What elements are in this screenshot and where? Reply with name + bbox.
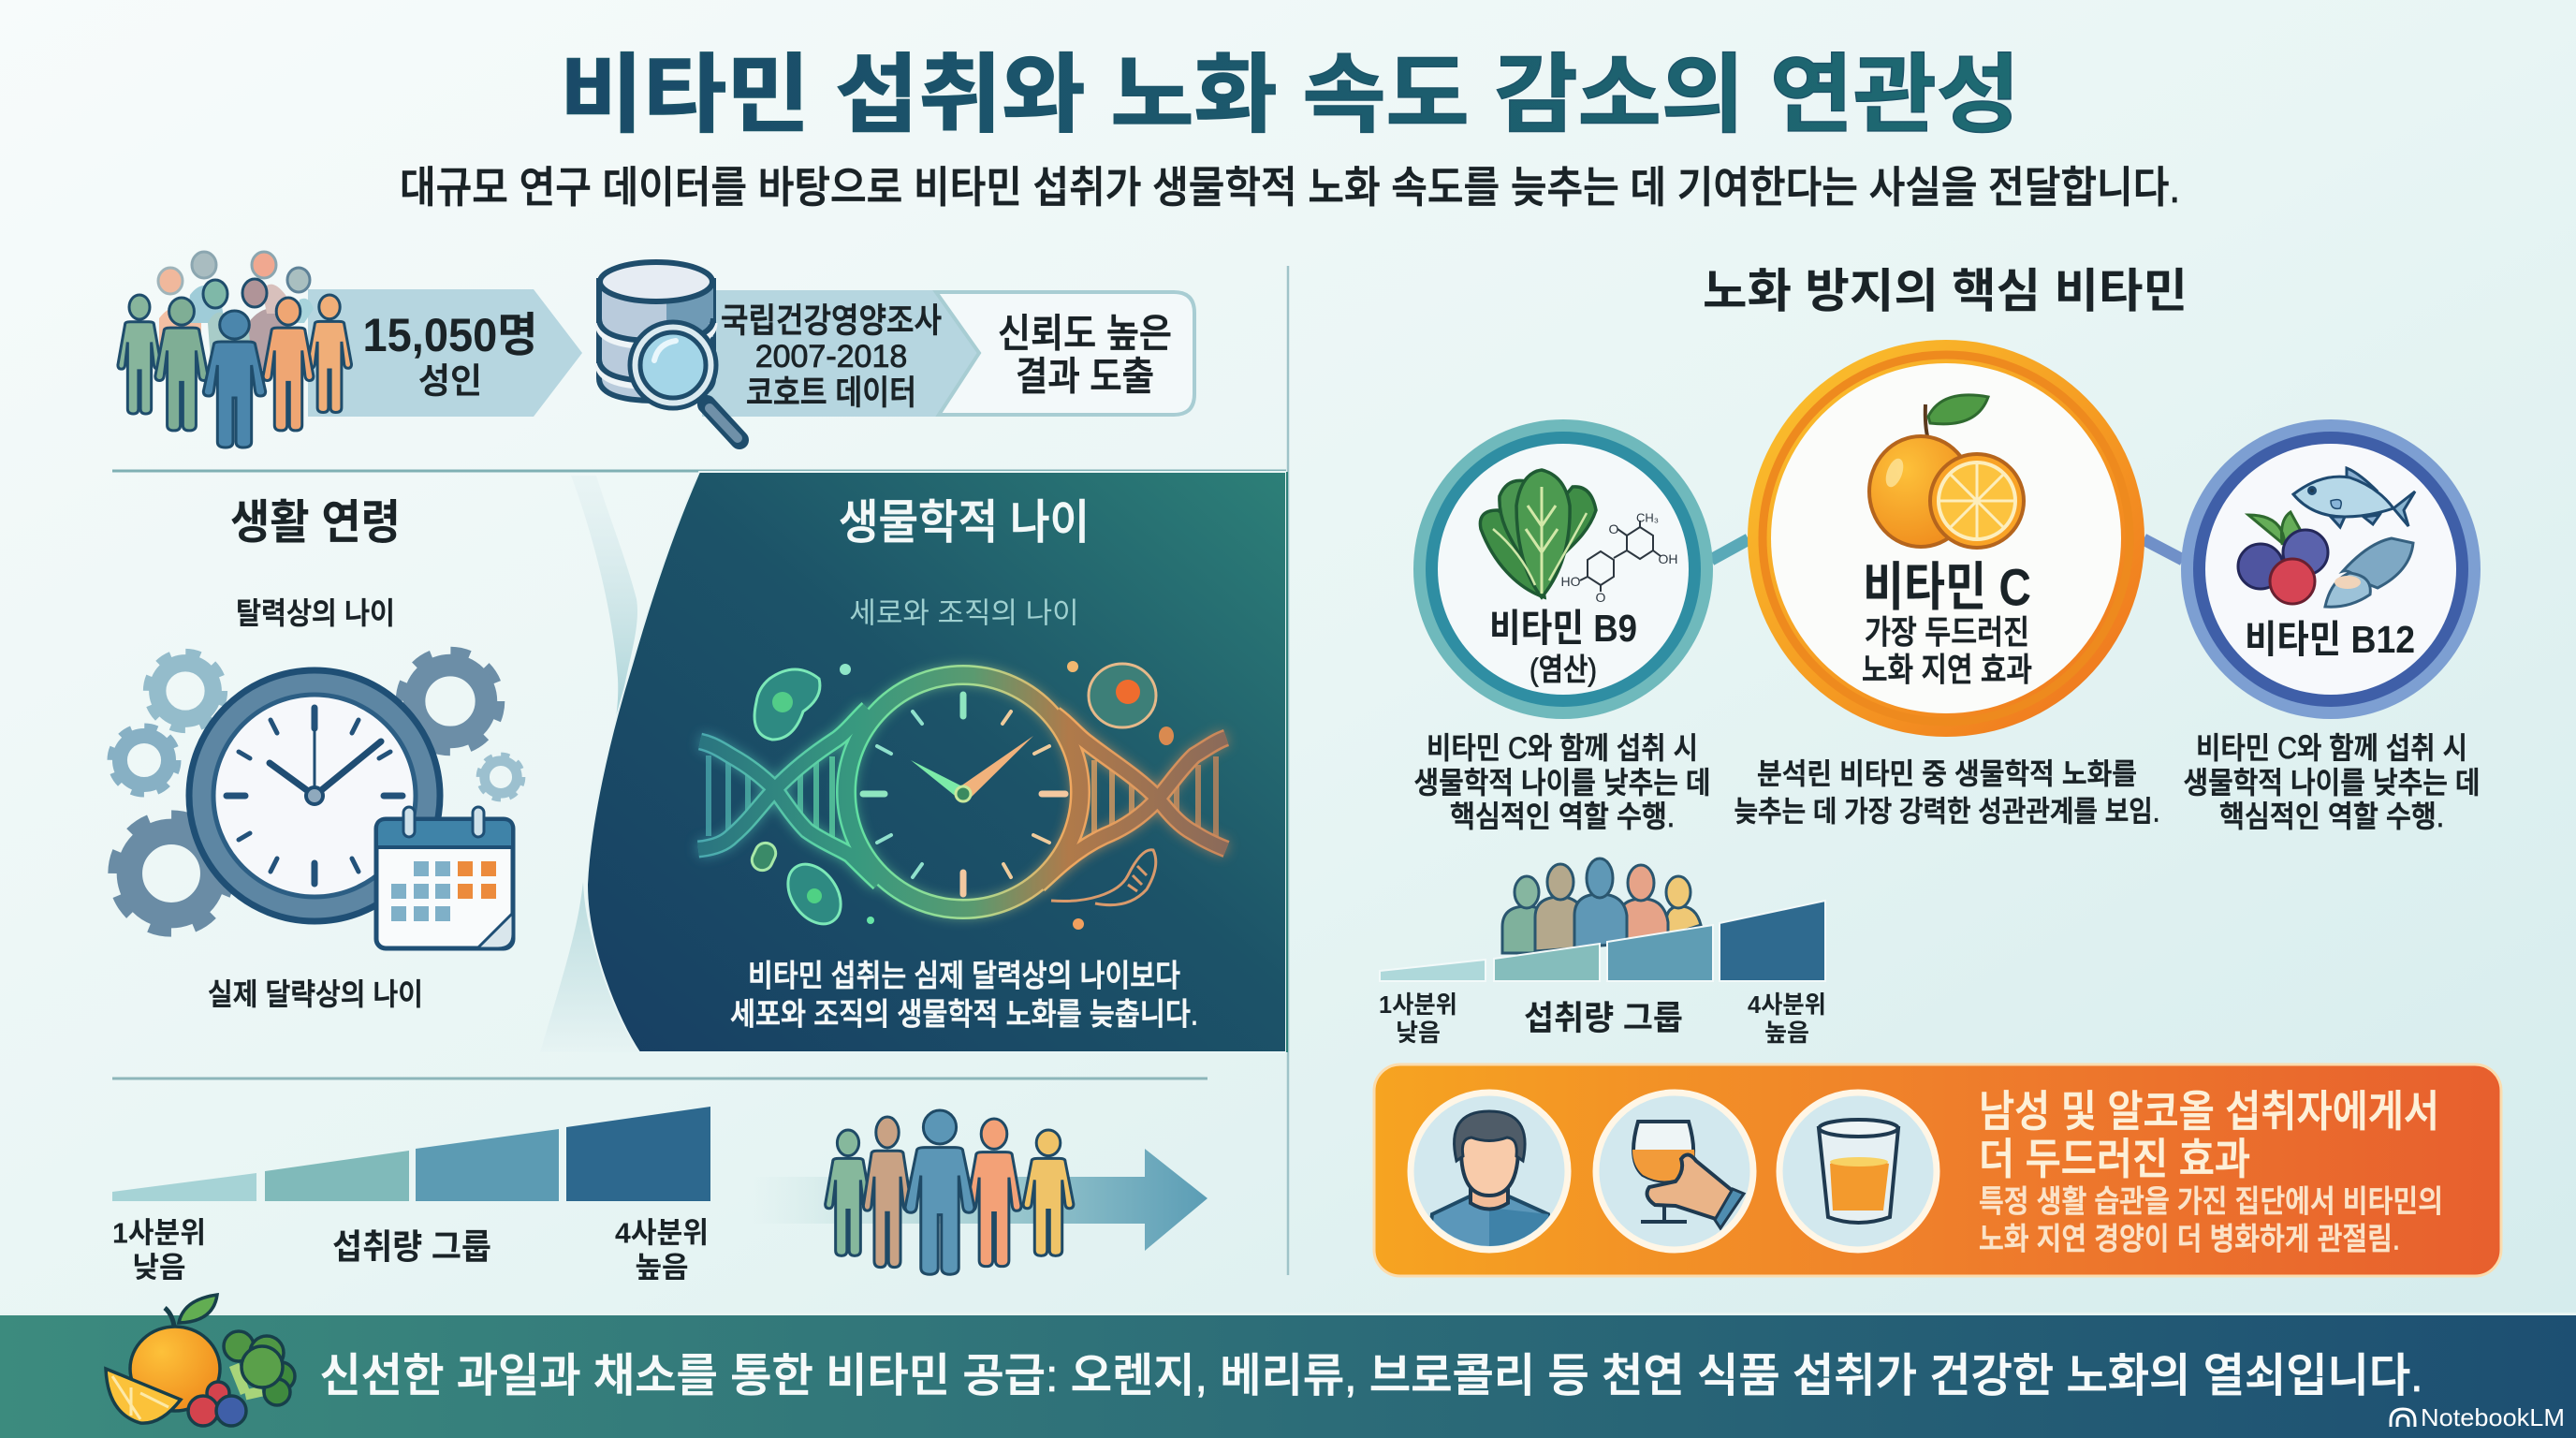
text: biological age statement: 세포와 조직의 생물학적 노화를 늦춥니다. <box>730 996 1198 1032</box>
icon: group of people <box>826 1110 1074 1274</box>
icon: wall clock <box>189 670 440 921</box>
text: B9 description: 생물학적 나이를 낮추는 데 <box>1413 766 1711 800</box>
heading: chronological age: 생활 연령 <box>230 496 401 549</box>
panel: vitamin B12 <box>2181 419 2481 719</box>
chart: small intake wedge: 섭취량 그룹 <box>1524 998 1683 1037</box>
icon: molecule: O <box>1609 521 1619 536</box>
footer band <box>0 1295 2576 1438</box>
logo: NotebookLM: NotebookLM <box>2421 1403 2565 1431</box>
text: participants: 15,050명 <box>363 309 537 361</box>
panel: vitamin B9: (염산) <box>1530 652 1597 687</box>
icon: small group of people <box>1502 858 1701 953</box>
text: data source: 2007-2018 <box>755 339 907 374</box>
box: reliable result: 신뢰도 높은 <box>998 311 1172 356</box>
heading: key vitamins: 노화 방지의 핵심 비타민 <box>1703 265 2188 317</box>
text: data source <box>721 301 942 412</box>
chart: intake quartile wedge: 낮음 <box>132 1251 186 1284</box>
subtitle: 대규모 연구 데이터를 바탕으로 비타민 섭취가 생물학적 노화 속도를 늦추는 데 기여한다는 사실을 전달합니다. <box>400 163 2180 212</box>
text: B9 description <box>1413 731 1711 833</box>
icon: database with magnifier <box>599 262 739 440</box>
text: footer message: 신선한 과일과 채소를 통한 비타민 공급: 오렌지, 베리류, 브로콜리 등 천연 식품 섭취가 건강한 노화의 열쇠입니다. <box>320 1351 2422 1401</box>
text: callout body <box>1979 1183 2443 1256</box>
text: B12 description: 핵심적인 역할 수행. <box>2219 800 2444 833</box>
chart: small intake wedge: 낮음 <box>1396 1019 1441 1047</box>
arrow: population trend <box>753 1149 1208 1251</box>
box: reliable result: 결과 도출 <box>1016 354 1154 399</box>
chart: small intake wedge: 4사분위 <box>1748 990 1826 1019</box>
icon: berries <box>2238 512 2328 604</box>
text: vitamin C description: 분석린 비타민 중 생물학적 노화를 <box>1757 758 2137 790</box>
icon: spinach <box>1480 470 1596 597</box>
text: B9 description: 비타민 C와 함께 섭취 시 <box>1427 731 1698 765</box>
title: 비타민 섭취와 노화 속도 감소의 연관성 <box>560 48 2020 143</box>
text: B12 label: 비타민 B12 <box>2245 618 2415 661</box>
arrow: participants band <box>308 289 582 417</box>
chart: small intake wedge <box>1379 901 1826 1047</box>
heading: biological age: 생물학적 나이 <box>839 496 1090 549</box>
chart: small intake wedge: 높음 <box>1764 1019 1809 1047</box>
icon: molecule: OH <box>1659 551 1677 566</box>
text: vitamin C label: 비타민 C <box>1863 558 2031 616</box>
text: calendar age label: 탈력상의 나이 <box>236 596 395 630</box>
icon: calendar <box>376 807 513 948</box>
decorative crescents <box>540 476 640 1052</box>
panel: vitamin C: 가장 두드러진 <box>1865 614 2029 652</box>
icon: molecule: CH₃ <box>1636 511 1659 524</box>
arrow: data band <box>702 290 982 417</box>
chart: intake quartile wedge: 높음 <box>635 1251 689 1284</box>
chart: intake quartile wedge <box>112 1107 710 1284</box>
text: cell age label: 세로와 조직의 나이 <box>849 597 1079 629</box>
chart: intake quartile wedge: 1사분위 <box>112 1217 206 1249</box>
chart: intake quartile wedge: 섭취량 그룹 <box>332 1228 491 1266</box>
box: reliable result <box>936 292 1194 415</box>
chart: intake quartile wedge: 4사분위 <box>615 1217 709 1249</box>
text: biological age statement: 비타민 섭취는 심제 달력상의 나이보다 <box>748 959 1180 992</box>
text: vitamin C description <box>1734 758 2160 828</box>
text: participants <box>363 309 537 401</box>
panel: vitamin B9 <box>1413 419 1713 719</box>
icon: wine glass and hand <box>1596 1093 1753 1250</box>
icon: fruit and vegetables <box>106 1295 295 1426</box>
icon: cells <box>749 661 1174 933</box>
icon: man <box>1411 1093 1568 1255</box>
icon: molecule <box>1561 511 1677 605</box>
panel: vitamin C: 노화 지연 효과 <box>1862 652 2032 689</box>
text: data source: 국립건강영양조사 <box>721 301 942 339</box>
panel: study flow <box>118 252 1194 448</box>
icon: oyster <box>2325 538 2413 607</box>
text: vitamin C description: 늦추는 데 가장 강력한 성관관계를 보임. <box>1734 796 2160 828</box>
chart: small intake wedge: 1사분위 <box>1379 990 1457 1019</box>
icon: gears <box>112 653 522 929</box>
text: callout body: 노화 지연 경양이 더 병화하게 관절림. <box>1979 1221 2400 1256</box>
connector lines <box>1711 539 1749 560</box>
icon: crowd of people <box>118 252 352 448</box>
panel: biological age <box>587 472 1288 1052</box>
icon: orange <box>1869 395 2024 548</box>
icon: drink glass <box>1779 1093 1937 1250</box>
panel: male and alcohol callout <box>1374 1064 2501 1276</box>
text: actual age label: 실제 달략상의 나이 <box>208 977 423 1011</box>
panel: vitamin C <box>1748 340 2144 737</box>
text: B12 description: 생물학적 나이를 낮추는 데 <box>2183 766 2481 800</box>
text: B9 description: 핵심적인 역할 수행. <box>1450 800 1675 833</box>
illustration: DNA clock <box>698 661 1226 933</box>
text: callout heading <box>1979 1087 2439 1183</box>
text: B12 description <box>2183 731 2481 833</box>
text: participants: 성인 <box>418 361 482 401</box>
text: B9 label: 비타민 B9 <box>1489 607 1637 650</box>
text: callout heading: 더 두드러진 효과 <box>1979 1135 2250 1183</box>
icon: molecule: O <box>1596 590 1606 605</box>
panel: chronological age <box>112 496 522 1011</box>
text: B12 description: 비타민 C와 함께 섭취 시 <box>2196 731 2467 765</box>
icon: molecule: HO <box>1561 574 1581 589</box>
DNA rungs <box>709 756 1216 840</box>
text: biological age statement <box>730 959 1198 1032</box>
text: callout body: 특정 생활 습관을 가진 집단에서 비타민의 <box>1979 1183 2443 1219</box>
text: callout heading: 남성 및 알코올 섭취자에게서 <box>1979 1087 2439 1136</box>
text: data source: 코호트 데이터 <box>746 373 916 412</box>
icon: fish <box>2293 468 2415 527</box>
